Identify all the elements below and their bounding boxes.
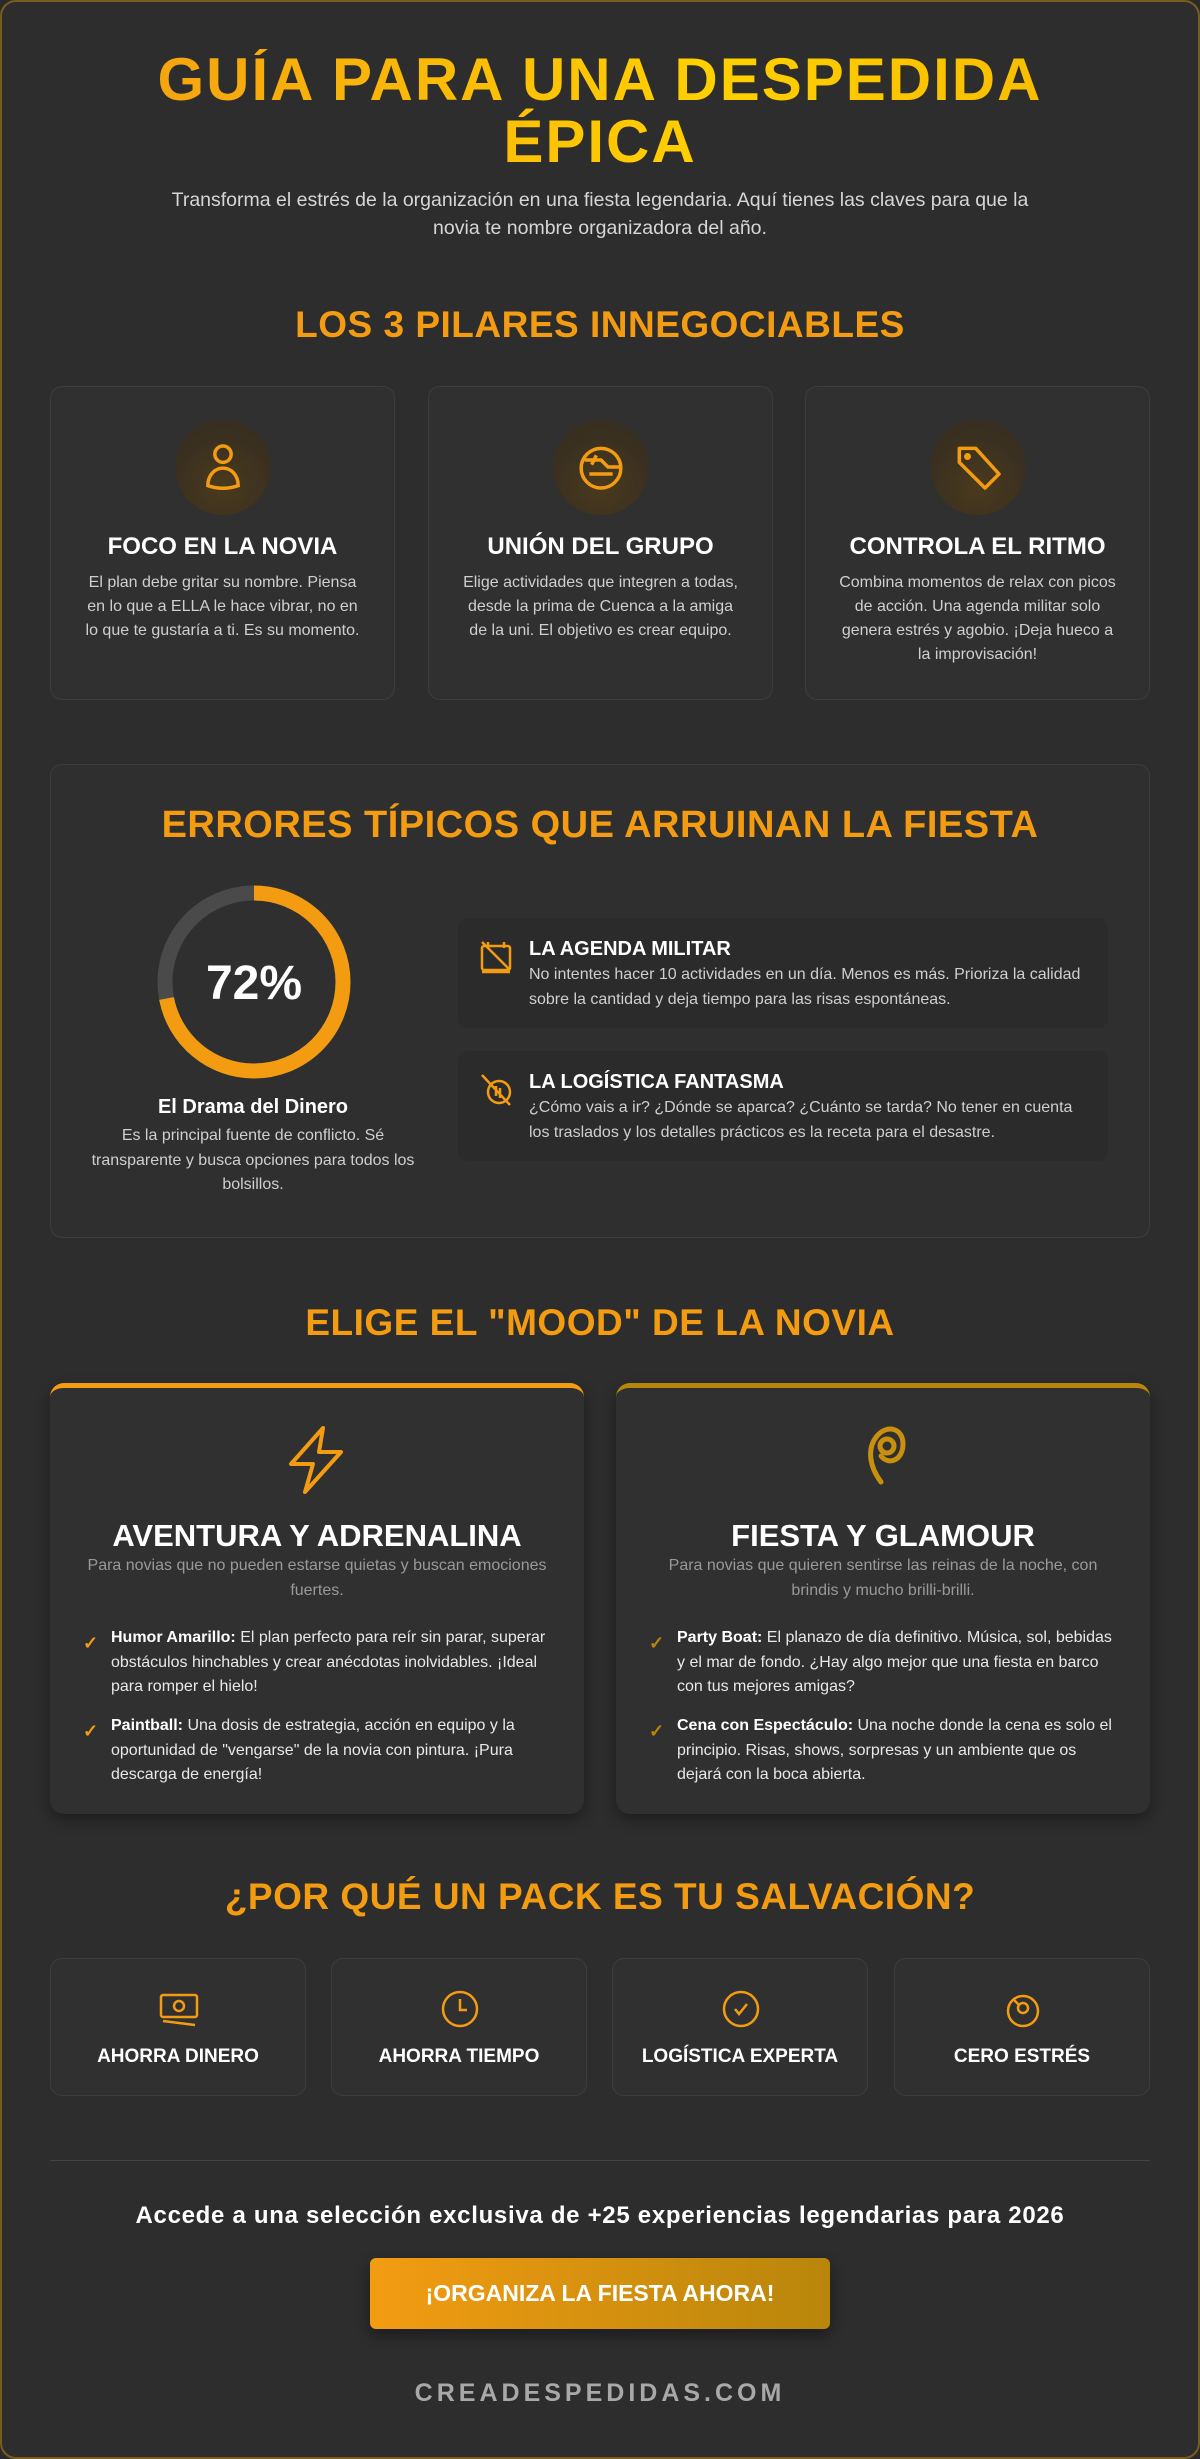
button: organiza [370, 2258, 830, 2329]
title: GUÍA PARA UNA DESPEDIDA [158, 46, 1042, 113]
donut chart 72% [158, 886, 350, 1078]
panel: pilar controla el ritmo [805, 386, 1150, 700]
benefit: logistica experta [612, 1958, 868, 2096]
panel: aventura y adrenalina: Para novias que no pueden estarse quietas y buscan emociones fuertes. [88, 1557, 546, 1598]
icon: group [552, 419, 648, 515]
icon: check circle [722, 1990, 760, 2028]
subtitle: Transforma el estrés de la organización en una fiesta legendaria. Aquí tienes las claves para que la novia te nombre organizadora del año. [172, 189, 1028, 239]
cta text: Accede a una selección exclusiva de +25 experiencias legendarias para 2026 [136, 2202, 1064, 2229]
panel: fiesta y glamour: Para novias que quieren sentirse las reinas de la noche, con brindis y mucho brilli-brilli. [669, 1557, 1097, 1598]
panel: pilar foco en la novia [50, 386, 395, 700]
icon: calendar crossed [480, 941, 512, 974]
text: Elige actividades que integren a todas, desde la prima de Cuenca a la amiga de la uni. El objetivo es crear equipo. [463, 574, 738, 639]
panel: fiesta y glamour: ✓ [649, 1633, 664, 1653]
icon: person [174, 419, 270, 515]
benefit: cero estres: CERO ESTRÉS [954, 2046, 1090, 2067]
panel: errores [50, 764, 1150, 1238]
heading: CONTROLA EL RITMO [850, 533, 1105, 560]
item: Party Boat: El planazo de día definitivo. Música, sol, bebidas y el mar de fondo. ¿Hay algo mejor que una fiesta en barco con tus mejores amigas? [677, 1629, 1112, 1695]
panel: aventura y adrenalina: ✓ [83, 1721, 98, 1741]
benefit: ahorra tiempo [331, 1958, 587, 2096]
panel: fiesta y glamour: FIESTA Y GLAMOUR [731, 1518, 1035, 1553]
icon: swirl [1006, 1994, 1040, 2028]
error: agenda militar: LA AGENDA MILITAR [529, 938, 731, 960]
error: logistica fantasma: LA LOGÍSTICA FANTASMA [529, 1071, 784, 1093]
heading: UNIÓN DEL GRUPO [487, 533, 714, 560]
text: drama del dinero: El Drama del Dinero [158, 1096, 348, 1118]
donut chart 72%: 72% [206, 957, 302, 1010]
text: drama del dinero: Es la principal fuente de conflicto. Sé transparente y busca opciones para todos los bolsillos. [92, 1127, 414, 1193]
heading: ERRORES TÍPICOS QUE ARRUINAN LA FIESTA [162, 804, 1038, 846]
text: drama del dinero [92, 1096, 414, 1193]
panel: fiesta y glamour [616, 1383, 1150, 1814]
heading: FOCO EN LA NOVIA [108, 533, 337, 560]
item: Cena con Espectáculo: Una noche donde la cena es solo el principio. Risas, shows, sorpresas y un ambiente que os dejará con la boca abierta. [677, 1717, 1112, 1783]
benefit: ahorra tiempo: AHORRA TIEMPO [379, 2046, 539, 2067]
text: Combina momentos de relax con picos de acción. Una agenda militar solo genera estrés y agobio. ¡Deja hueco a la improvisación! [839, 574, 1116, 663]
benefit: logistica experta: LOGÍSTICA EXPERTA [642, 2046, 838, 2067]
title [50, 49, 1150, 173]
icon: lightning [288, 1426, 344, 1494]
error: logistica fantasma: ¿Cómo vais a ir? ¿Dónde se aparca? ¿Cuánto se tarda? No tener en cuenta los traslados y los detalles prácticos es la receta para el desastre. [529, 1099, 1072, 1141]
title: ÉPICA [503, 108, 697, 175]
heading: pack: ¿POR QUÉ UN PACK ES TU SALVACIÓN? [225, 1876, 975, 1917]
item: Humor Amarillo: El plan perfecto para reír sin parar, superar obstáculos hinchables y crear anécdotas inolvidables. ¡Ideal para romper el hielo! [111, 1629, 545, 1695]
button: organiza: ¡ORGANIZA LA FIESTA AHORA! [426, 2280, 774, 2306]
error: agenda militar: No intentes hacer 10 actividades en un día. Menos es más. Prioriza la calidad sobre la cantidad y deja tiempo para las risas espontáneas. [529, 966, 1080, 1008]
panel: pilar union del grupo [428, 386, 773, 700]
footer brand: CREADESPEDIDAS.COM [415, 2379, 785, 2407]
text: El plan debe gritar su nombre. Piensa en lo que a ELLA le hace vibrar, no en lo que te gustaría a ti. Es su momento. [86, 574, 359, 639]
benefit: cero estres [894, 1958, 1150, 2096]
icon: map crossed [481, 1074, 512, 1106]
icon: spiral [868, 1426, 906, 1484]
benefit: ahorra dinero: AHORRA DINERO [97, 2046, 259, 2067]
panel: aventura y adrenalina [50, 1383, 584, 1814]
heading: mood: ELIGE EL "MOOD" DE LA NOVIA [305, 1302, 895, 1343]
panel: aventura y adrenalina: ✓ [83, 1633, 98, 1653]
panel: fiesta y glamour: ✓ [649, 1721, 664, 1741]
icon: money [160, 1994, 198, 2026]
error: logistica fantasma [458, 1051, 1108, 1161]
error: agenda militar [458, 918, 1108, 1028]
benefit: ahorra dinero [50, 1958, 306, 2096]
panel: aventura y adrenalina: AVENTURA Y ADRENALINA [112, 1518, 522, 1553]
icon: tag [930, 419, 1026, 515]
item: Paintball: Una dosis de estrategia, acción en equipo y la oportunidad de "vengarse" de la novia con pintura. ¡Pura descarga de energía! [111, 1717, 515, 1783]
heading: pilares: LOS 3 PILARES INNEGOCIABLES [295, 304, 905, 345]
icon: clock [442, 1990, 478, 2028]
